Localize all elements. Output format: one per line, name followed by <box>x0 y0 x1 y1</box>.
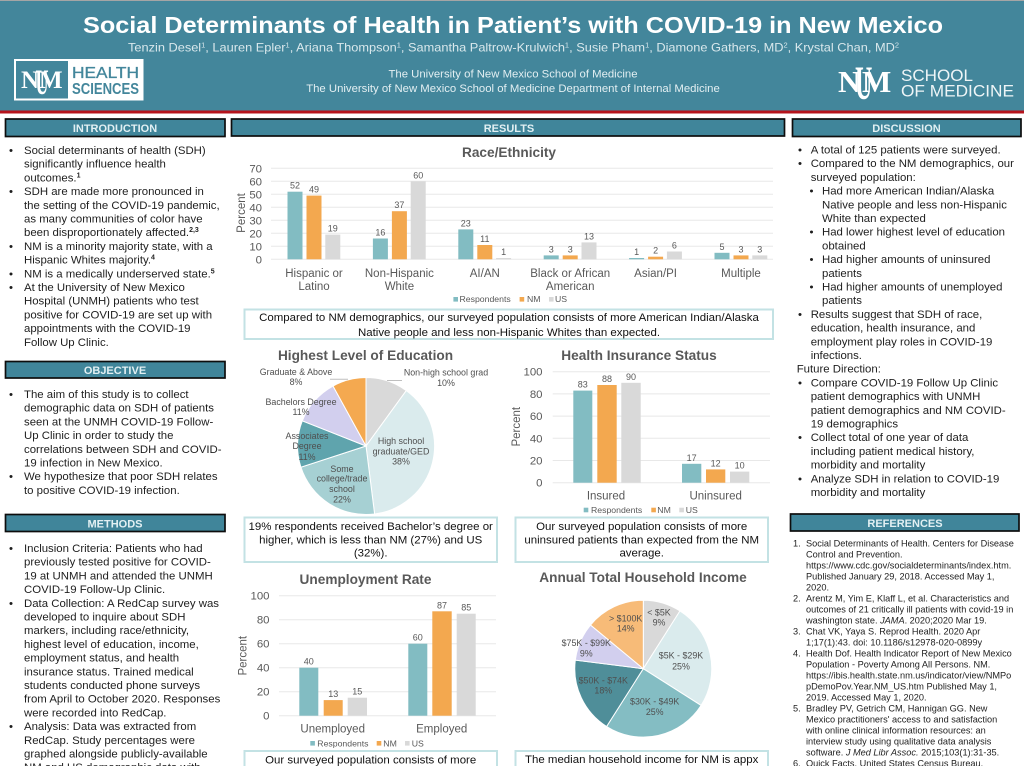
callout: race/ethnicity: Compared to NM demographics, our surveyed population consists of more American Indian/Alaska <box>259 312 759 324</box>
text block: discussion bullets: patient demographics and NM COVID- <box>811 405 1006 417</box>
text block: methods bullets: developed to inquire about SDH <box>24 612 185 624</box>
pie chart: highest level of education: Associates <box>286 431 329 441</box>
bar chart: race/ethnicity: 70 <box>249 163 262 175</box>
callout: health insurance: uninsured patients than expected from the NM <box>524 534 759 546</box>
text block: discussion bullets: White than expected <box>822 213 926 225</box>
bar chart: race/ethnicity: Multiple <box>721 268 761 280</box>
text block: reference list <box>793 539 1014 766</box>
bar chart: race/ethnicity: 60 <box>413 170 423 180</box>
text block: reference list: Health Dof. Health Indicator Report of New Mexico <box>806 649 1012 659</box>
text block: discussion bullets: • <box>798 377 802 389</box>
text block: reference list: Mexico practitioners' access to and satisfaction <box>806 715 997 725</box>
text block: introduction bullets: NM is a medically underserved state. <box>24 268 211 280</box>
text block: introduction bullets: • <box>9 282 13 294</box>
text block: methods bullets: highest level of education, income, <box>24 639 199 651</box>
legend: US <box>412 738 424 748</box>
legend: NM <box>383 738 397 748</box>
text block: discussion bullets: Had more American Indian/Alaska <box>822 186 995 198</box>
text block: methods bullets: 19 at UNMH and attended the UNMH <box>24 570 213 582</box>
bar chart: unemployment rate: 15 <box>352 687 362 697</box>
logo: UNM Health Sciences: N <box>21 67 39 94</box>
bar chart: race/ethnicity: 1 <box>501 247 506 257</box>
bar chart: race/ethnicity: 30 <box>249 215 262 227</box>
callout: education: higher, which is less than NM (27%) and US <box>259 534 483 546</box>
pie chart: annual total household income: 25% <box>672 661 690 671</box>
text block: methods bullets: Data Collection: A RedCap survey was <box>24 598 219 610</box>
chart title: Health Insurance Status <box>561 348 717 363</box>
pie chart: highest level of education: 10% <box>437 378 455 388</box>
pie chart: annual total household income: < $5K <box>647 607 671 617</box>
bar chart: health insurance status: 20 <box>530 456 542 468</box>
text block: discussion bullets: infections. <box>811 350 862 362</box>
text block: reference list: with online clinical information resources: an <box>805 726 986 736</box>
bar chart: race/ethnicity: 3 <box>568 244 573 254</box>
text block: discussion bullets: A total of 125 patients were surveyed. <box>811 144 1001 156</box>
bar chart: race/ethnicity: 37 <box>394 200 404 210</box>
bar chart: race/ethnicity: 5 <box>719 242 725 252</box>
text block: discussion bullets: Future Direction: <box>797 364 881 376</box>
text block: discussion bullets: • <box>810 186 814 198</box>
text block: discussion bullets: Had lower highest level of education <box>822 227 1005 239</box>
legend: NM <box>657 505 671 515</box>
text block: introduction bullets: NM is a minority majority state, with a <box>24 241 213 253</box>
text block: methods bullets: students conducted phone surveys <box>24 680 200 692</box>
text block: discussion bullets: education, health insurance, and <box>811 323 975 335</box>
text block: introduction bullets: significantly influence health <box>24 159 166 171</box>
heading: methods: METHODS <box>88 518 142 530</box>
text block: introduction bullets: 1 <box>77 172 81 179</box>
bar chart: health insurance status: 100 <box>523 367 542 379</box>
bar chart: health insurance status: 88 <box>602 374 612 384</box>
pie chart: highest level of education: Some <box>330 464 354 474</box>
pie chart: annual total household income: $75K - $99K <box>562 638 611 648</box>
text block: objective bullets: to positive COVID-19 infection. <box>24 485 180 497</box>
legend: US <box>555 294 567 304</box>
bar chart: unemployment rate: 100 <box>250 591 270 603</box>
text block: discussion bullets: obtained <box>822 240 866 252</box>
bar chart: health insurance status: 17 <box>687 453 697 463</box>
panel: discussion <box>792 119 1021 499</box>
authors: 1 <box>645 42 649 50</box>
heading: objective: OBJECTIVE <box>84 365 146 377</box>
pie chart: annual total household income: > $100K <box>609 613 642 623</box>
bar chart: unemployment rate: 80 <box>257 615 270 627</box>
text block: reference list: Published January 29, 2018. Accessed May 1, <box>806 572 994 582</box>
bar chart: race/ethnicity: 13 <box>584 231 594 241</box>
authors: , Diamone Gathers, MD <box>649 40 784 54</box>
text block: discussion bullets: Native people and less non-Hispanic <box>822 199 1007 211</box>
text block: discussion bullets: Had higher amounts of unemployed <box>822 282 1002 294</box>
bar chart: race/ethnicity: 3 <box>757 244 762 254</box>
text block: discussion bullets: • <box>798 432 802 444</box>
logo: UNM School of Medicine: OF MEDICINE <box>901 82 1014 101</box>
text block: reference list: 2019. Accessed May 1, 2020. <box>806 693 927 703</box>
bar chart: race/ethnicity: 6 <box>672 240 677 250</box>
pie chart: annual total household income: $30K - $49K <box>630 696 679 706</box>
legend: Respondents <box>317 738 369 748</box>
authors: 1 <box>565 42 569 50</box>
bar chart: health insurance status: 80 <box>530 389 542 401</box>
panel: methods <box>6 514 225 766</box>
text block: reference list: Population - Poverty Among All Persons. NM. <box>806 660 990 670</box>
text block: reference list: interview study using qualitative data analysis <box>806 737 992 747</box>
authors: , Lauren Epler <box>205 40 286 54</box>
logo: UNM School of Medicine: U <box>855 57 872 110</box>
bar chart: race/ethnicity: 52 <box>290 181 300 191</box>
text block: introduction bullets: Follow Up Clinic. <box>24 337 109 349</box>
text block: methods bullets: Analysis: Data was extracted from <box>24 721 196 733</box>
bar chart: race/ethnicity: 40 <box>249 202 262 214</box>
text block: reference list: 3. <box>793 627 801 637</box>
text block: discussion bullets: patient demographics with UNMH <box>811 391 980 403</box>
text block: reference list: 1. <box>793 539 801 549</box>
bar chart: race/ethnicity: 19 <box>328 224 338 234</box>
authors: 2 <box>895 42 899 50</box>
bar chart: race/ethnicity: 10 <box>249 241 262 253</box>
pie chart: annual total household income: 18% <box>594 686 612 696</box>
callout: income: The median household income for NM is appx <box>525 754 759 766</box>
pie chart: highest level of education: 22% <box>333 495 351 505</box>
bar chart: unemployment rate: 40 <box>304 657 314 667</box>
legend <box>453 294 567 304</box>
pie chart: highest level of education: Non-high school grad <box>404 368 488 378</box>
text block: introduction bullets: positive for COVID-19 are set up with <box>24 309 212 321</box>
bar chart: unemployment rate: 85 <box>461 603 471 613</box>
text block: introduction bullets: • <box>9 268 13 280</box>
text block: discussion bullets: morbidity and mortality <box>811 487 926 499</box>
bar chart: race/ethnicity: Non-Hispanic <box>365 268 434 280</box>
chart title: Race/Ethnicity <box>462 145 556 160</box>
authors: 1 <box>286 42 290 50</box>
authors: Tenzin Desel <box>128 40 197 54</box>
bar chart: unemployment rate: 40 <box>257 663 270 675</box>
bar chart: health insurance status: 90 <box>626 372 636 382</box>
text block: methods bullets: markers, including race/ethnicity, <box>24 625 189 637</box>
text block: methods bullets: COVID-19 Follow-Up Clinic. <box>24 584 165 596</box>
bar chart: unemployment rate: 87 <box>437 600 447 610</box>
bar chart: race/ethnicity: Latino <box>298 281 330 293</box>
bar chart: unemployment rate: Percent <box>238 635 250 676</box>
text block: discussion bullets: • <box>810 282 814 294</box>
legend <box>584 505 698 515</box>
callout: education <box>244 518 497 562</box>
bar chart: unemployment rate: 20 <box>257 687 270 699</box>
text block: introduction bullets: 4 <box>151 255 155 262</box>
bar chart: health insurance status: 0 <box>536 478 542 490</box>
panel: objective <box>6 362 225 497</box>
text block: introduction bullets <box>9 145 220 349</box>
text block: methods bullets: insurance status. Trained medical <box>24 666 194 678</box>
text block: introduction bullets: Hospital (UNMH) patients who test <box>24 296 200 308</box>
bar chart: race/ethnicity: 3 <box>738 244 744 254</box>
text block: reference list: 5. <box>793 704 801 714</box>
text block: introduction bullets: 2,3 <box>189 227 199 234</box>
callout: education: 19% respondents received Bachelor’s degree or <box>249 521 493 533</box>
bar chart: unemployment rate <box>238 572 496 748</box>
text block: objective bullets: demographic data on SDH of patients <box>24 403 214 415</box>
text block: introduction bullets: Social determinants of health (SDH) <box>24 145 206 157</box>
legend: NM <box>527 294 541 304</box>
authors: , Susie Pham <box>569 40 645 54</box>
text block: introduction bullets: 5 <box>211 268 215 275</box>
bar chart: race/ethnicity: 20 <box>249 228 262 240</box>
bar chart: race/ethnicity: 0 <box>256 254 262 266</box>
logo: UNM Health Sciences: U <box>36 64 49 103</box>
panel: introduction <box>6 119 225 349</box>
authors: 2 <box>783 42 788 50</box>
pie chart: highest level of education: 11% <box>298 452 316 462</box>
text block: discussion bullets: Had higher amounts of uninsured <box>822 254 990 266</box>
text block: discussion bullets: • <box>798 473 802 485</box>
legend <box>310 738 424 748</box>
affiliations <box>306 68 720 95</box>
heading: results: RESULTS <box>484 123 534 135</box>
bar chart: unemployment rate: Unemployed <box>300 724 365 736</box>
text block: discussion bullets: Collect total of one year of data <box>811 432 969 444</box>
legend: Respondents <box>591 505 643 515</box>
text block: reference list: Chat VK, Yaya S. Reprod Health. 2020 Apr <box>806 627 980 637</box>
affiliations: The University of New Mexico School of Medicine <box>388 68 638 80</box>
text block: methods bullets: • <box>9 721 13 733</box>
bar chart: race/ethnicity: 11 <box>480 234 489 244</box>
heading: methods <box>6 514 225 532</box>
heading: objective <box>6 362 225 378</box>
bar chart: race/ethnicity: 3 <box>549 244 554 254</box>
text block: discussion bullets: Compared to the NM demographics, our <box>811 158 1014 170</box>
bar chart: race/ethnicity: Asian/PI <box>634 268 677 280</box>
bar chart: race/ethnicity: 23 <box>461 218 471 228</box>
chart title: Unemployment Rate <box>300 572 432 587</box>
logo: UNM Health Sciences <box>14 59 144 103</box>
text block: methods bullets: previously tested positive for COVID- <box>24 557 211 569</box>
bar chart: health insurance status: 40 <box>530 433 542 445</box>
text block: discussion bullets: • <box>798 158 802 170</box>
text block: objective bullets: • <box>9 389 13 401</box>
callout: unemployment: Our surveyed population consists of more <box>265 754 476 766</box>
pie chart: annual total household income: $50K - $74K <box>579 676 628 686</box>
pie chart: annual total household income: 9% <box>653 618 666 628</box>
bar chart: race/ethnicity: Hispanic or <box>285 268 343 280</box>
logo: UNM School of Medicine: M <box>862 64 891 99</box>
pie chart: highest level of education: Graduate & Above <box>260 367 332 377</box>
pie chart: highest level of education: 8% <box>290 377 303 387</box>
logo: UNM Health Sciences: M <box>39 67 63 94</box>
bar chart: race/ethnicity: 16 <box>375 228 385 238</box>
pie chart: annual total household income: 14% <box>617 624 635 634</box>
text block: introduction bullets: SDH are made more pronounced in <box>24 186 204 198</box>
panel: references <box>790 514 1019 766</box>
callout: health insurance <box>516 518 768 562</box>
text block: reference list: pDemoPov.Year.NM_US.htm Published May 1, <box>806 682 997 692</box>
heading: results <box>232 119 784 136</box>
bar chart: race/ethnicity: White <box>385 281 414 293</box>
callout: education: (32%). <box>354 548 388 560</box>
bar chart: health insurance status <box>511 348 770 515</box>
affiliations: The University of New Mexico School of Medicine Department of Internal Medicine <box>306 83 720 95</box>
text block: objective bullets: We hypothesize that poor SDH relates <box>24 471 218 483</box>
text block: methods bullets: graphed alongside publicly-available <box>24 748 208 760</box>
pie chart: highest level of education: school <box>329 484 355 494</box>
heading: discussion <box>792 119 1021 136</box>
pie chart: highest level of education: Bachelors Degree <box>265 397 337 407</box>
text block: methods bullets: • <box>9 598 13 610</box>
text block: objective bullets: Up Clinic in order to study the <box>24 430 173 442</box>
text block: methods bullets: from April to October 2020. Responses <box>24 694 221 706</box>
bar chart: unemployment rate: 13 <box>328 689 338 699</box>
text block: introduction bullets: At the University of New Mexico <box>24 282 185 294</box>
text block: discussion bullets: • <box>810 254 814 266</box>
title: Social Determinants of Health in Patient’s with COVID-19 in New Mexico <box>83 12 943 38</box>
pie chart: highest level of education: graduate/GED <box>373 447 429 457</box>
text block: reference list: washington state. JAMA. 2020;2020 Mar 19. <box>805 616 987 626</box>
text block: methods bullets: were recorded into RedCap. <box>23 707 166 719</box>
text block: introduction bullets: • <box>9 241 13 253</box>
text block: discussion bullets: patients <box>822 295 862 307</box>
bar chart: race/ethnicity: 2 <box>653 246 658 256</box>
authors: , Ariana Thompson <box>290 40 397 54</box>
bar chart: race/ethnicity: AI/AN <box>470 268 500 280</box>
bar chart: race/ethnicity: 1 <box>634 247 639 257</box>
logo: UNM Health Sciences: SCIENCES <box>72 81 139 98</box>
bar chart: race/ethnicity: 60 <box>249 176 262 188</box>
pie chart: highest level of education: 38% <box>392 457 410 467</box>
text block: reference list: Social Determinants of Health. Centers for Disease <box>806 539 1014 549</box>
heading: references <box>790 514 1019 531</box>
bar chart: health insurance status: 83 <box>578 380 588 390</box>
text block: introduction bullets: as many communities of color have <box>24 214 203 226</box>
chart title: Annual Total Household Income <box>539 570 747 585</box>
text block: objective bullets: correlations between SDH and COVID- <box>24 444 222 456</box>
text block: reference list: https://www.cdc.gov/socialdeterminants/index.htm. <box>806 561 1011 571</box>
bar chart: health insurance status: 60 <box>530 411 542 423</box>
bar chart: race/ethnicity: 50 <box>249 189 262 201</box>
bar chart: race/ethnicity: 49 <box>309 185 319 195</box>
text block: introduction bullets: • <box>9 145 13 157</box>
text block: objective bullets: 19 infection in New Mexico. <box>24 458 163 470</box>
text block: methods bullets: RedCap. Study percentages were <box>24 735 195 747</box>
text block: introduction bullets: been disproportionately affected. <box>24 227 189 239</box>
chart title: Highest Level of Education <box>278 348 453 363</box>
text block: reference list: Arentz M, Yim E, Klaff L, et al. Characteristics and <box>806 594 1009 604</box>
bar chart: race/ethnicity: American <box>546 281 594 293</box>
text block: reference list: 4. <box>793 649 801 659</box>
logo: UNM School of Medicine <box>838 57 1014 110</box>
authors: , Samantha Paltrow-Krulwich <box>401 40 565 54</box>
heading: references: REFERENCES <box>867 518 943 530</box>
text block: discussion bullets: surveyed population: <box>811 172 916 184</box>
bar chart: health insurance status: 12 <box>711 458 721 468</box>
callout: race/ethnicity <box>244 310 773 339</box>
text block: discussion bullets: Analyze SDH in relation to COVID-19 <box>811 473 999 485</box>
pie chart: annual total household income: 9% <box>580 649 593 659</box>
bar chart: health insurance status: Percent <box>511 406 523 447</box>
pie chart: highest level of education: college/trade <box>317 474 367 484</box>
pie chart: highest level of education: High school <box>378 436 424 446</box>
pie chart: highest level of education: Degree <box>292 441 322 451</box>
bar chart: health insurance status: Insured <box>587 490 625 502</box>
pie chart: annual total household income <box>539 570 747 737</box>
text block: introduction bullets: Hispanic Whites majority. <box>24 255 151 267</box>
pie chart: highest level of education <box>260 348 488 515</box>
text block: introduction bullets: appointments with the COVID-19 <box>24 323 191 335</box>
logo: UNM School of Medicine: N <box>838 64 860 99</box>
text block: discussion bullets: • <box>810 227 814 239</box>
text block: objective bullets <box>9 389 222 497</box>
text block: discussion bullets: Results suggest that SDH of race, <box>811 309 982 321</box>
text block: reference list: Bradley PV, Getrich CM, Hannigan GG. New <box>806 704 988 714</box>
text block: reference list: software. J Med Libr Assoc. 2015;103(1):31-35. <box>806 748 999 758</box>
legend: Respondents <box>460 294 511 304</box>
header banner <box>0 0 1024 114</box>
text block: discussion bullets: • <box>798 144 802 156</box>
bar chart: race/ethnicity: Percent <box>236 192 248 233</box>
text block: discussion bullets: including patient medical history, <box>811 446 974 458</box>
text block: methods bullets: Inclusion Criteria: Patients who had <box>24 543 203 555</box>
callout: health insurance: average. <box>619 548 664 560</box>
legend: US <box>686 505 698 515</box>
authors: 1 <box>201 42 205 50</box>
text block: reference list: 2. <box>793 594 801 604</box>
bar chart: health insurance status: 10 <box>735 461 745 471</box>
panel: results <box>232 119 784 766</box>
authors: , Krystal Chan, MD <box>788 40 895 54</box>
callout: race/ethnicity: Native people and less non-Hispanic Whites than expected. <box>358 327 660 339</box>
callout: unemployment <box>244 751 497 766</box>
bar chart: unemployment rate: 0 <box>263 711 270 723</box>
text block: discussion bullets <box>797 144 1014 499</box>
text block: discussion bullets: • <box>798 309 802 321</box>
text block: introduction bullets: outcomes. <box>24 172 77 184</box>
text block: discussion bullets: Compare COVID-19 Follow Up Clinic <box>811 377 998 389</box>
text block: methods bullets: • <box>9 543 13 555</box>
bar chart: health insurance status: Uninsured <box>689 490 742 502</box>
bar chart: unemployment rate: Employed <box>416 724 467 736</box>
text block: reference list: Control and Prevention. <box>806 550 903 560</box>
heading: introduction: INTRODUCTION <box>73 123 157 135</box>
text block: reference list: outcomes of 21 critically ill patients with covid-19 in <box>806 605 1013 615</box>
text block: introduction bullets: • <box>9 186 13 198</box>
logo: UNM Health Sciences: HEALTH <box>72 65 139 82</box>
heading: discussion: DISCUSSION <box>872 123 941 135</box>
pie chart: annual total household income: $5K - $29K <box>659 651 703 661</box>
bar chart: unemployment rate: 60 <box>257 639 270 651</box>
pie chart: highest level of education: 11% <box>292 407 310 417</box>
text block: methods bullets: employment status, and health <box>24 653 179 665</box>
bar chart: race/ethnicity <box>236 145 773 304</box>
text block: reference list: https://ibis.health.state.nm.us/indicator/view/NMPo <box>806 671 1011 681</box>
text block: introduction bullets: the setting of the COVID-19 pandemic, <box>24 200 220 212</box>
text block: reference list: 2020. <box>806 583 829 593</box>
text block: discussion bullets: morbidity and mortality <box>811 460 926 472</box>
text block: discussion bullets: patients <box>822 268 862 280</box>
bar chart: unemployment rate: 60 <box>413 633 423 643</box>
heading: introduction <box>6 119 225 136</box>
callout: health insurance: Our surveyed population consists of more <box>536 521 747 533</box>
text block: objective bullets: The aim of this study is to collect <box>24 389 189 401</box>
text block: reference list: 1;17(1):43. doi: 10.1186/s12978-020-0899y <box>806 638 982 648</box>
pie chart: annual total household income: 25% <box>646 707 664 717</box>
text block: methods bullets <box>9 543 221 766</box>
text block: objective bullets: seen at the UNMH COVID-19 Follow- <box>24 416 213 428</box>
text block: discussion bullets: employment play roles in COVID-19 <box>811 336 992 348</box>
authors: 1 <box>397 42 401 50</box>
text block: objective bullets: • <box>9 471 13 483</box>
bar chart: race/ethnicity: Black or African <box>530 268 610 280</box>
text block: discussion bullets: 19 demographics <box>811 418 898 430</box>
logo: UNM School of Medicine: SCHOOL <box>901 66 973 85</box>
